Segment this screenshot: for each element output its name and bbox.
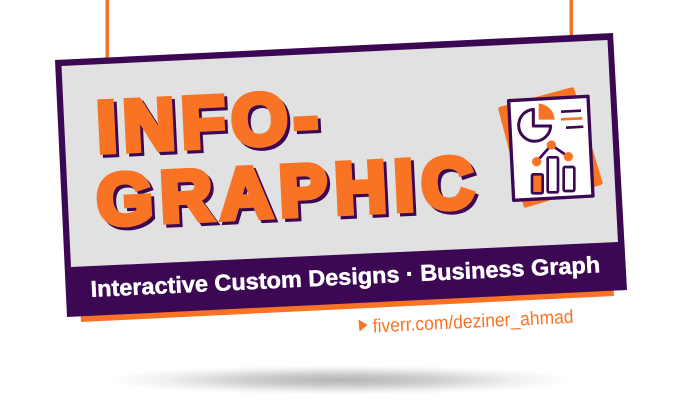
icon: text lines	[561, 111, 583, 128]
ground shadow	[105, 365, 575, 395]
icon: pie chart	[519, 104, 555, 141]
left hanging strap	[106, 0, 109, 60]
icon: line graph with dots	[532, 140, 573, 166]
title: INFO-: INFO-	[98, 80, 323, 171]
icon: bar chart	[532, 157, 574, 193]
icon: report document with charts	[501, 90, 600, 205]
right hanging strap	[570, 0, 573, 38]
title: GRAPHIC: GRAPHIC	[98, 146, 478, 244]
sign frame	[55, 33, 627, 317]
link text: fiverr.com/deziner_ahmad	[372, 307, 574, 337]
icon: orange back sheet	[501, 90, 600, 205]
icon: play arrow	[358, 320, 368, 332]
title: GRAPHIC: GRAPHIC	[95, 143, 475, 241]
title: INFO-: INFO-	[95, 77, 320, 168]
orange under-strip	[80, 280, 614, 322]
icon: white sheet	[509, 96, 593, 200]
sign grey panel	[62, 40, 618, 267]
subtitle: Interactive Custom Designs · Business Graph	[90, 251, 601, 302]
